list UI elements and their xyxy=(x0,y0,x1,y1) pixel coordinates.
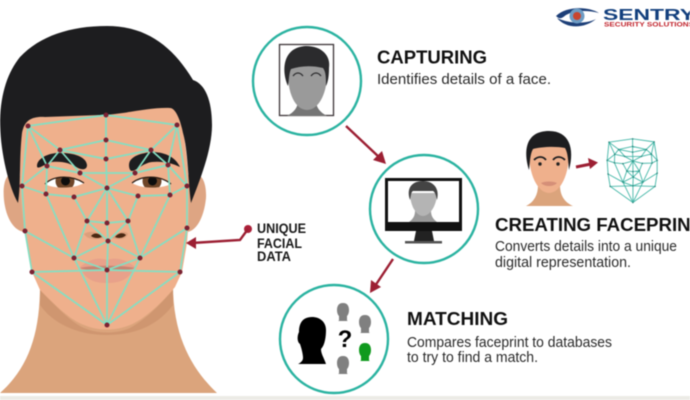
text: creating faceprint description: digital representation. xyxy=(495,255,631,271)
question mark: ? xyxy=(338,326,352,353)
mouth xyxy=(80,259,135,283)
text: creating faceprint description xyxy=(495,239,677,271)
main face illustration xyxy=(0,26,217,393)
panel: matching circle xyxy=(280,285,388,393)
small face illustration xyxy=(526,131,573,206)
text: matching description: to try to find a match. xyxy=(407,350,538,366)
arrow: faceprint to matching xyxy=(370,259,393,293)
right eyebrow xyxy=(129,152,180,171)
pointer arrow: unique facial data xyxy=(186,225,252,249)
panel: monitor circle xyxy=(370,155,478,263)
text: creating faceprint description: Converts details into a unique xyxy=(495,239,677,255)
heading: matching: MATCHING xyxy=(407,308,508,329)
icon: monitor xyxy=(385,178,462,244)
arrow: capturing to faceprint xyxy=(346,126,386,164)
face mesh nodes xyxy=(22,115,187,325)
neck xyxy=(0,285,217,393)
left eye xyxy=(44,176,85,188)
icon: gray head top xyxy=(337,303,349,321)
text: matching description: Compares faceprint to databases xyxy=(407,335,612,351)
label: unique facial data: FACIAL xyxy=(257,236,302,251)
icon: green head match xyxy=(359,343,371,361)
label: unique facial data: UNIQUE xyxy=(257,221,306,236)
icon: large head silhouette xyxy=(298,317,326,364)
nose xyxy=(84,232,128,239)
logo: sentry security solutions xyxy=(556,7,690,28)
label: unique facial data: DATA xyxy=(257,249,291,264)
chin shadow xyxy=(40,290,173,335)
icon: gray head bottom xyxy=(337,356,349,374)
icon: eye xyxy=(556,8,599,26)
left eyebrow xyxy=(37,153,87,169)
hair xyxy=(0,26,212,203)
text: capturing description: Identifies details of a face. xyxy=(377,72,551,88)
label: unique facial data xyxy=(257,221,306,264)
ears xyxy=(4,173,206,232)
panel: capturing circle xyxy=(253,27,361,135)
faceprint mesh xyxy=(607,139,657,202)
arrow: face to faceprint xyxy=(576,158,598,169)
heading: capturing: CAPTURING xyxy=(377,46,487,68)
icon: gray head right xyxy=(359,315,371,333)
icon: passport photo xyxy=(280,44,334,116)
face skin xyxy=(20,95,189,330)
text: matching description xyxy=(407,335,612,366)
face mesh lines xyxy=(22,115,187,325)
logo: sentry security solutions: SECURITY SOLUTIONS xyxy=(604,22,690,28)
logo: sentry security solutions: SENTRY xyxy=(603,7,690,24)
right eye xyxy=(131,176,172,188)
